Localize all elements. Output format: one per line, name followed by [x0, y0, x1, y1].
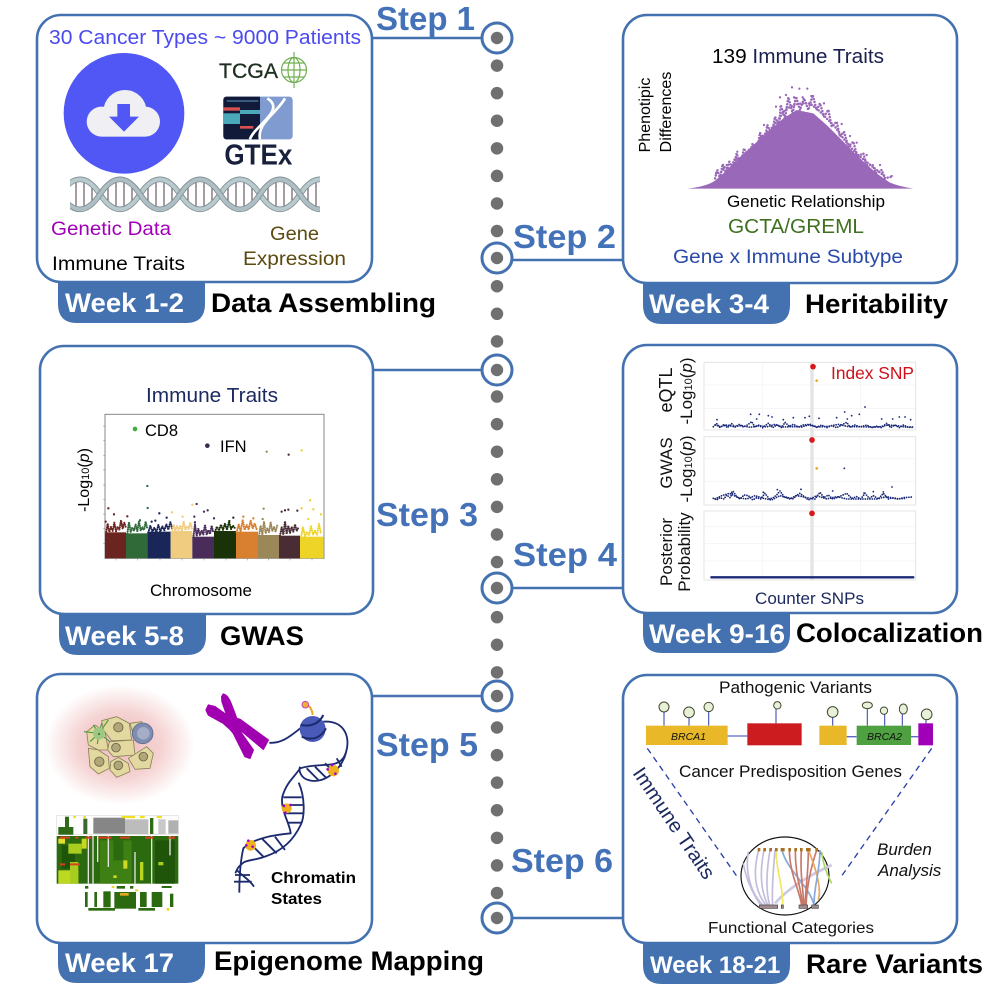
icon: tumour cell cluster	[45, 685, 195, 805]
label: chromatin states	[271, 870, 356, 908]
panel heading: GWAS	[220, 621, 304, 651]
method label: GCTA/GREML	[728, 216, 864, 238]
panel heading: Heritability	[805, 289, 948, 319]
chart title: 139 Immune Traits	[712, 46, 884, 68]
gene label: BRCA2: BRCA2	[867, 731, 902, 743]
chart title: Immune Traits	[146, 385, 278, 407]
y axis labels: -Log10(p)	[677, 357, 696, 425]
step label 5: Step 5	[376, 726, 478, 763]
icon: chromosome and DNA with histone marks	[206, 694, 347, 893]
diagram: functional category flow circle	[741, 837, 832, 915]
heading: pathogenic variants: Pathogenic Variants	[719, 679, 872, 697]
step label 1: Step 1	[376, 0, 475, 37]
y axis label: Phenotipic	[637, 78, 654, 152]
y axis labels: -Log10(p)	[677, 435, 696, 503]
panel heading: Rare Variants	[806, 949, 983, 979]
diagram: gene exons with lollipop variants	[646, 702, 933, 878]
label: IFN: IFN	[220, 438, 247, 456]
week badge text: Week 1-2	[65, 288, 184, 318]
panel: data assembling	[37, 15, 436, 323]
panel: epigenome mapping	[37, 674, 484, 983]
week badge text: Week 9-16	[649, 619, 785, 649]
x axis label: Chromosome	[150, 582, 252, 600]
y axis label	[637, 72, 675, 152]
y axis label: -Log10(p)	[76, 448, 93, 512]
panel: heritability	[623, 15, 957, 324]
label: CD8: CD8	[145, 422, 178, 440]
step label 3: Step 3	[376, 496, 478, 533]
y axis labels: GWAS	[657, 437, 676, 489]
label: gene expression: Expression	[243, 248, 346, 270]
panel heading: Colocalization	[796, 618, 983, 648]
chart: manhattan plot	[103, 414, 324, 560]
label: immune traits: Immune Traits	[52, 254, 185, 275]
label: burden analysis: Analysis	[877, 861, 942, 880]
y axis labels: Posterior	[657, 518, 676, 586]
chart: chromatin state heatmap	[57, 815, 178, 911]
label: genetic data: Genetic Data	[51, 218, 171, 240]
TCGA logo	[219, 52, 306, 88]
step label 2: Step 2	[513, 218, 616, 255]
label: immune traits along dashed line: Immune Traits	[628, 763, 719, 884]
chart: three stacked locus plots	[704, 362, 916, 580]
label: gene expression: Gene	[270, 223, 319, 245]
week badge text: Week 18-21	[650, 952, 780, 979]
GTEx logo: GTEx	[224, 140, 292, 172]
y axis labels: Probability	[675, 512, 694, 592]
step label 6: Step 6	[511, 842, 613, 879]
label: index SNP: Index SNP	[831, 363, 914, 383]
x axis label: Genetic Relationship	[727, 193, 885, 211]
cohort text: 30 Cancer Types ~ 9000 Patients	[49, 27, 361, 49]
label: chromatin states: States	[271, 891, 322, 908]
week badge text: Week 3-4	[649, 289, 769, 319]
label: burden analysis: Burden	[877, 840, 932, 859]
interaction label: Gene x Immune Subtype	[673, 246, 903, 268]
step label 4: Step 4	[513, 536, 618, 573]
label: cancer predisposition genes: Cancer Predisposition Genes	[679, 762, 902, 781]
label: chromatin states: Chromatin	[271, 870, 356, 887]
week badge text: Week 17	[65, 948, 174, 978]
TCGA logo: TCGA	[219, 60, 278, 83]
timeline: dotted spine with step nodes	[373, 23, 623, 933]
panel heading: Epigenome Mapping	[214, 946, 484, 976]
scatter: purple bell distribution	[687, 87, 913, 189]
panel: rare variants	[623, 675, 983, 984]
label: functional categories: Functional Categories	[708, 920, 874, 937]
y axis labels: eQTL	[656, 367, 676, 413]
panel: colocalization	[623, 345, 983, 653]
y axis labels	[656, 357, 696, 592]
y axis label: Differences	[658, 72, 675, 152]
label: gene expression	[243, 223, 346, 270]
label: burden analysis	[877, 840, 942, 880]
icon: DNA helix	[60, 179, 340, 209]
panel heading: Data Assembling	[211, 288, 436, 318]
gene label: BRCA1: BRCA1	[671, 731, 706, 743]
GTEx logo	[223, 97, 293, 172]
x axis label: Counter SNPs	[755, 590, 864, 608]
week badge text: Week 5-8	[65, 621, 184, 651]
panel: GWAS	[40, 346, 373, 655]
icon: cloud download	[64, 53, 184, 174]
